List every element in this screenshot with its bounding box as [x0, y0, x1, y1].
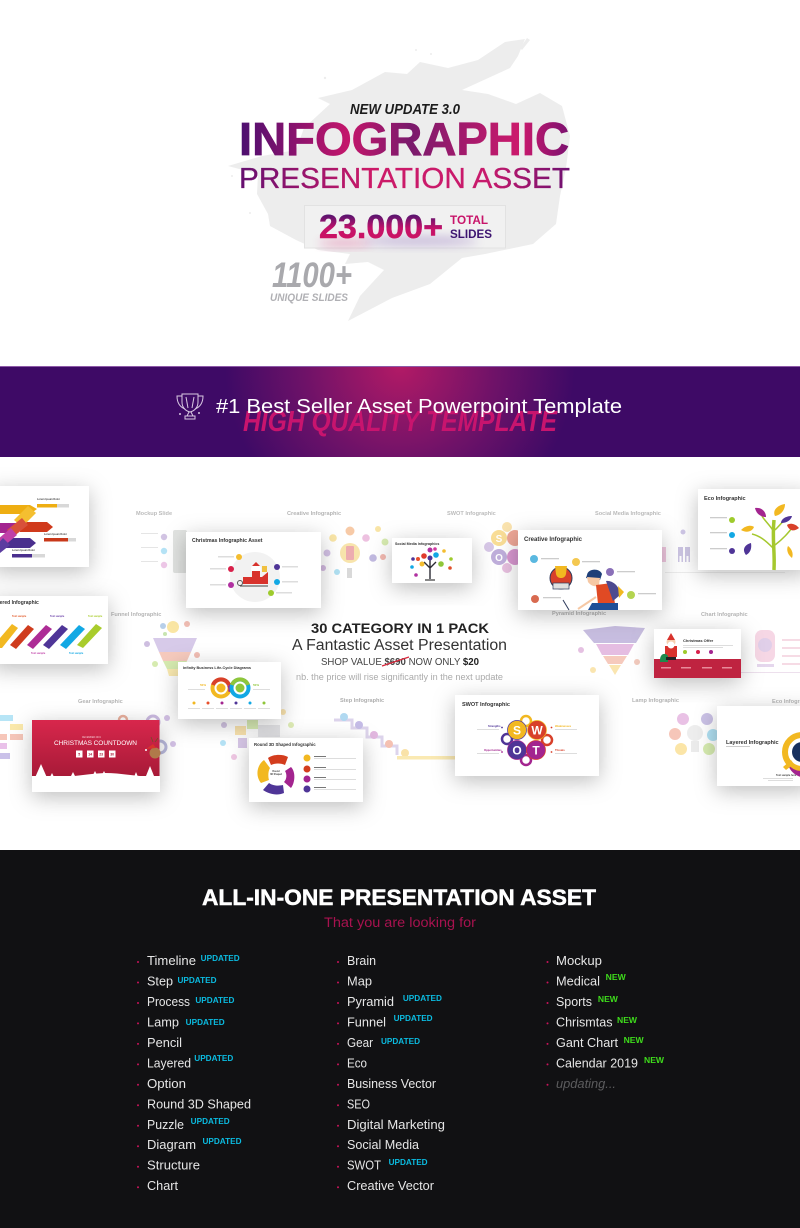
faded slide: chart [701, 612, 800, 673]
card: infinity life-cycle: 50% [200, 683, 206, 687]
faded slide: mockup: Mockup Slide [136, 511, 172, 517]
list column 1: Step [147, 974, 173, 988]
faded slide: creative: Creative Infographic [287, 511, 341, 517]
new update label: NEW UPDATE 3.0 [350, 102, 460, 118]
card: christmas countdown [32, 720, 160, 792]
card: layered infographic right: Layered Infographic [726, 740, 779, 746]
list column 1: Timeline [147, 953, 196, 968]
total count: 23.000+ [319, 208, 443, 245]
list column 1: UPDATED [202, 1137, 242, 1146]
best seller banner [0, 366, 800, 457]
list column 1: UPDATED [201, 954, 240, 963]
list column 1: Diagram [147, 1137, 196, 1152]
card: creative infographic: Creative Infographic [524, 537, 583, 543]
card: swot infographic: Threats [555, 748, 565, 752]
list column 1: Puzzle [147, 1117, 184, 1132]
card: layered infographic: Text sample [88, 615, 103, 618]
list column 2: Social Media [347, 1137, 420, 1152]
faded slide: funnel [111, 612, 200, 676]
unique slides label: UNIQUE SLIDES [270, 292, 349, 304]
faded slide: swot [447, 511, 523, 573]
list column 3: NEW [617, 1016, 637, 1025]
card: timeline arrows: Lorem Ipsum Dolor [44, 533, 67, 536]
list column 3: Gant Chart [556, 1035, 618, 1050]
card: christmas countdown: DECEMBER 2019 [82, 737, 101, 739]
faded slide: pyramid: Pyramid Infographic [552, 611, 606, 617]
faded slide: swot: SWOT Infographic [447, 511, 496, 517]
list column 3: NEW [644, 1056, 664, 1065]
list column 2: Pyramid [347, 994, 394, 1009]
faded slide: lamp [632, 698, 719, 755]
card: layered infographic right [717, 706, 800, 786]
faded slide: social media [595, 511, 785, 573]
card: christmas countdown: CHRISTMAS COUNTDOWN [54, 740, 137, 747]
total label: TOTAL [450, 215, 488, 227]
list column 2: Brain [347, 953, 376, 968]
card: swot infographic: O [512, 744, 522, 758]
list column 2: UPDATED [403, 994, 442, 1003]
card: layered infographic: Text sample [69, 652, 84, 655]
card: layered infographic [0, 596, 108, 664]
icon: trophy [177, 394, 203, 419]
faded slide: creative [287, 511, 388, 578]
list column 1: Structure [147, 1158, 200, 1173]
card: swot infographic: SWOT Infographic [462, 702, 510, 708]
card: swot infographic: S [513, 724, 521, 738]
slide collage section [0, 457, 800, 850]
list column 2: Creative Vector [347, 1178, 435, 1193]
card: eco infographic [698, 489, 800, 570]
card: swot infographic [455, 695, 599, 776]
faded slide: lamp: Lamp Infographic [632, 698, 679, 704]
list column 2: SWOT [347, 1158, 381, 1173]
card: timeline arrows: Lorem Ipsum Dolor [12, 549, 35, 552]
list column 1: UPDATED [178, 976, 217, 985]
list column 3: Calendar 2019 [556, 1055, 638, 1070]
list column 1: UPDATED [191, 1117, 230, 1126]
list column 1: UPDATED [195, 996, 235, 1005]
card: round 3d shaped [249, 738, 363, 802]
card: swot infographic: Weaknesses [555, 724, 572, 728]
list column 3: Chrismtas [556, 1014, 613, 1029]
card: christmas offer: Christmas Offer [683, 638, 714, 643]
card: creative infographic [518, 530, 662, 610]
section subtitle: That you are looking for [324, 915, 477, 930]
shop value price: SHOP VALUE $690 NOW ONLY $20 [321, 656, 479, 668]
list column 1: Round 3D Shaped [147, 1096, 251, 1111]
price note: nb. the price will rise significantly in the next update [296, 672, 503, 683]
card: christmas offer [654, 629, 741, 678]
faded slide: mockup [136, 511, 187, 573]
card: swot infographic: W [531, 724, 543, 738]
card: swot infographic: Opportunities [484, 748, 502, 752]
card: eco infographic: Eco Infographic [704, 496, 746, 502]
total slides box [304, 206, 506, 248]
faded slide: funnel: Funnel Infographic [111, 612, 161, 618]
list column 2: Business Vector [347, 1076, 437, 1091]
hero section [0, 0, 800, 366]
faded slide: vector [220, 709, 294, 760]
card: christmas infographic [186, 532, 321, 608]
list column 3: Medical [556, 974, 600, 988]
list column 3: updating... [556, 1076, 616, 1091]
section title: ALL-IN-ONE PRESENTATION ASSET [202, 885, 596, 910]
list column 2: SEO [347, 1096, 370, 1111]
list column 2: Map [347, 974, 372, 988]
card: swot infographic: Strengths [488, 724, 501, 728]
offer tagline: A Fantastic Asset Presentation [292, 637, 507, 654]
list column 2 [337, 953, 445, 1193]
faded slide: pyramid [552, 611, 645, 675]
card: infinity life-cycle: 50% [253, 683, 259, 687]
list column 3: NEW [606, 973, 626, 982]
list column 1: Layered [147, 1055, 191, 1070]
card: infinity life-cycle [178, 662, 281, 719]
main title: INFOGRAPHIC [239, 113, 569, 165]
card: layered infographic: Text sample [50, 615, 65, 618]
faded slide: chart: Chart Infographic [701, 612, 748, 618]
list column 2: Digital Marketing [347, 1117, 445, 1132]
faded slide: gear: Gear Infographic [78, 699, 123, 705]
list column 1 [137, 953, 251, 1193]
list column 1: UPDATED [194, 1054, 234, 1063]
card: christmas infographic: Christmas Infographic Asset [192, 538, 263, 544]
faded slide: social media: Social Media Infographic [595, 511, 661, 517]
card: swot infographic: T [532, 744, 540, 758]
slides label: SLIDES [450, 229, 492, 241]
list column 1: Process [147, 994, 190, 1009]
brush stroke background [228, 38, 570, 321]
list column 1: Option [147, 1076, 186, 1091]
list column 3: Sports [556, 994, 592, 1009]
card: round 3d shaped: 3D Shaped [270, 774, 283, 776]
card: christmas countdown: 30 [110, 752, 114, 756]
card: timeline arrows: Lorem Ipsum Dolor [37, 498, 60, 501]
faded slide: gear [0, 699, 176, 759]
faded slide: step: Step Infographic [340, 698, 384, 704]
faded slide: step [334, 698, 455, 760]
card: layered infographic: Text sample [31, 652, 46, 655]
list column 2: UPDATED [389, 1158, 428, 1167]
center offer text [292, 620, 507, 683]
card: timeline arrows [0, 486, 89, 567]
card: round 3d shaped: Round 3D Shaped Infographic [254, 742, 316, 747]
list column 1: Lamp [147, 1014, 179, 1029]
card: christmas countdown: 14 [88, 752, 92, 756]
card: social media infographics [392, 538, 472, 583]
offer headline: 30 CATEGORY IN 1 PACK [311, 620, 489, 636]
list column 3 [546, 953, 664, 1091]
card: christmas countdown: 5 [78, 752, 80, 756]
card: round 3d shaped: Round [272, 771, 280, 773]
list column 2: Gear [347, 1035, 374, 1050]
subtitle: PRESENTATION ASSET [239, 163, 570, 195]
card: layered infographic right: Text sample here [776, 774, 797, 777]
card: christmas countdown: 23 [99, 752, 103, 756]
unique slides count: 1100+ [272, 256, 352, 295]
card: layered infographic: Text sample [12, 615, 27, 618]
list column 3: Mockup [556, 953, 602, 968]
list column 1: UPDATED [186, 1018, 225, 1027]
faded slide: swot: S [496, 534, 503, 545]
list column 2: Funnel [347, 1014, 386, 1029]
list column 2: UPDATED [394, 1014, 433, 1023]
list column 2: Eco [347, 1055, 367, 1070]
card: infinity life-cycle: Infinity Business Life-Cycle Diagrams [183, 666, 251, 670]
list column 2: UPDATED [381, 1037, 420, 1046]
all-in-one dark section [0, 850, 800, 1228]
banner background text: HIGH QUALITY TEMPLATE [243, 406, 558, 438]
list column 3: NEW [624, 1036, 644, 1045]
banner headline: #1 Best Seller Asset Powerpoint Template [216, 396, 622, 418]
list column 3: NEW [598, 995, 618, 1004]
card: social media infographics: Social Media Infographics [395, 542, 439, 546]
faded slide: swot: O [495, 553, 503, 564]
list column 1: Chart [147, 1178, 178, 1193]
list column 1: Pencil [147, 1035, 182, 1050]
